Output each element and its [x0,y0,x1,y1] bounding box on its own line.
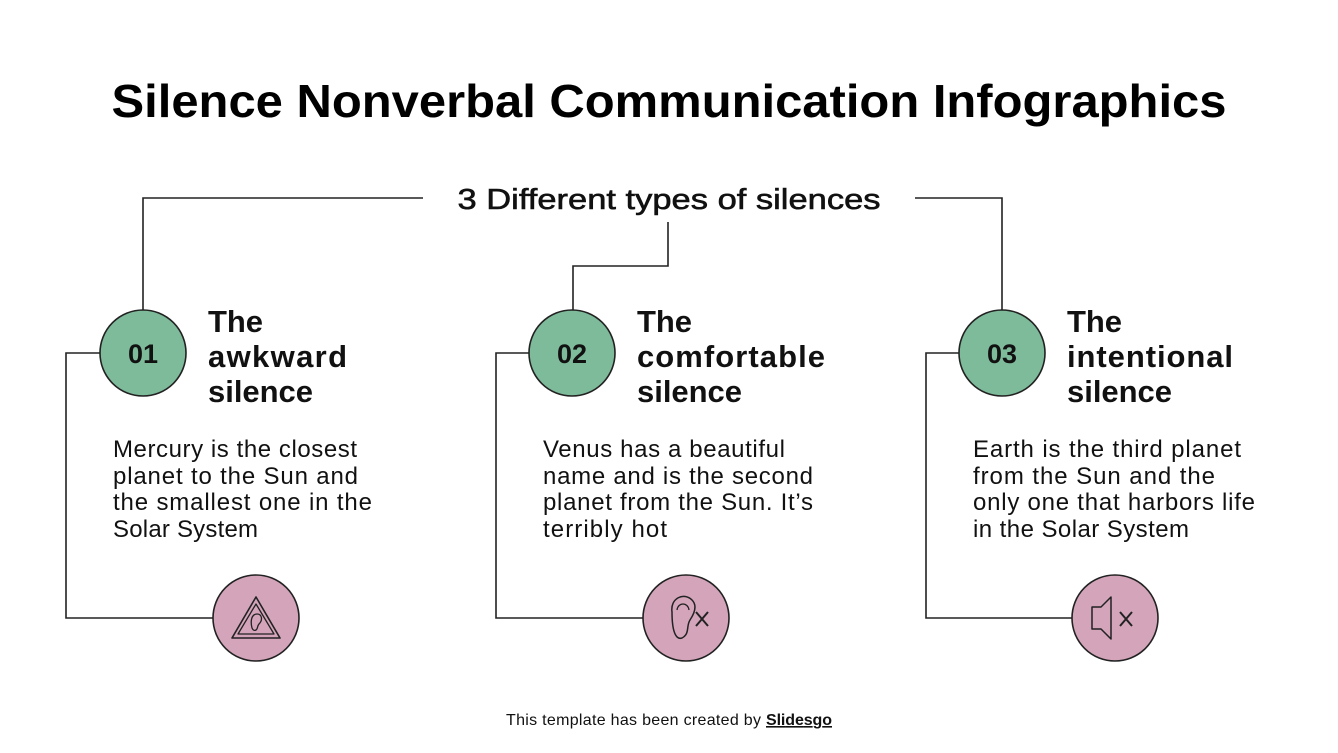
heading 02: The [637,304,692,339]
body text 01: the smallest one in the [113,489,372,516]
number badge 02 [529,310,615,396]
heading 03: intentional [1067,339,1233,374]
icon: ear crossed [643,575,729,661]
body text 02: planet from the Sun. It’s [543,489,813,516]
body text 01: planet to the Sun and [113,463,358,490]
icon: speaker muted [1072,575,1158,661]
body text 02: terribly hot [543,516,667,543]
panel: 02 comfortable silence [529,304,825,661]
number badge 02: 02 [557,339,587,369]
heading 02: comfortable [637,339,825,374]
number badge 01: 01 [128,339,158,369]
body text 03: only one that harbors life [973,489,1255,516]
panel: 03 intentional silence [959,304,1255,661]
body text 01: Mercury is the closest [113,436,357,463]
title: Silence Nonverbal Communication Infographics [112,75,1226,127]
heading 03: The [1067,304,1122,339]
body text 03: Earth is the third planet [973,436,1241,463]
body text 02: name and is the second [543,463,813,490]
heading 01: awkward [208,339,347,374]
body text 02: Venus has a beautiful [543,436,785,463]
footer credit: This template has been created by [506,712,761,729]
body text 03: in the Solar System [973,516,1189,543]
connector lines [66,198,1072,618]
subtitle: 3 Different types of silences [458,184,880,216]
heading 01: The [208,304,263,339]
number badge 03 [959,310,1045,396]
number badge 03: 03 [987,339,1017,369]
body text 01: Solar System [113,516,258,543]
footer credit: Slidesgo [766,712,832,729]
icon: warning ear [213,575,299,661]
body text 03: from the Sun and the [973,463,1215,490]
heading 02: silence [637,374,742,409]
heading 03: silence [1067,374,1172,409]
heading 01: silence [208,374,313,409]
panel: 01 awkward silence [100,304,372,661]
number badge 01 [100,310,186,396]
